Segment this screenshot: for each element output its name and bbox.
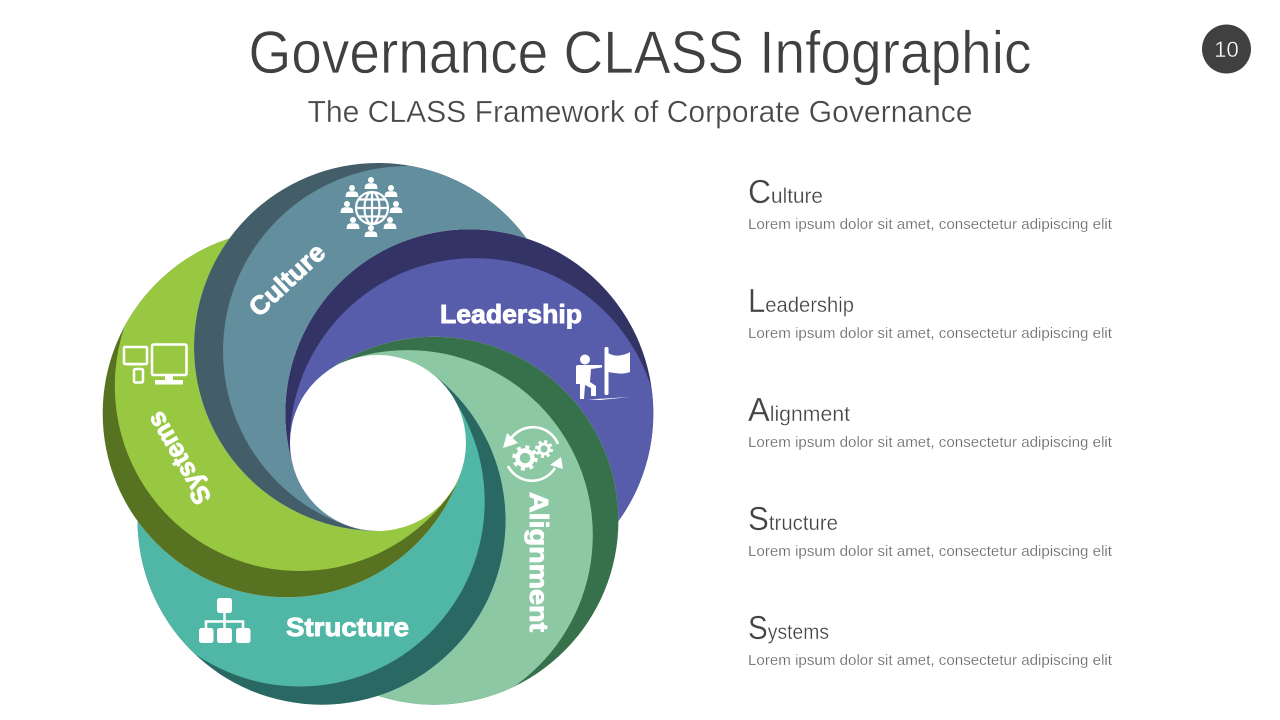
text block: Leadership (748, 282, 1112, 342)
label: Alignment: Alignment (524, 492, 554, 632)
page number badge (1202, 24, 1251, 74)
text block: Alignment: Lorem ipsum dolor sit amet, consectetur adipiscing elit (748, 435, 1112, 451)
subtitle: The CLASS Framework of Corporate Governance (308, 94, 972, 129)
title: Governance CLASS Infographic (248, 19, 1032, 86)
centre hole (290, 355, 466, 531)
text block: Leadership: Leadership (748, 282, 854, 319)
text block: Systems: Systems (748, 609, 829, 646)
icon: organisation chart (199, 598, 250, 643)
text block: Alignment (748, 391, 1112, 451)
text block: Structure: Lorem ipsum dolor sit amet, consectetur adipiscing elit (748, 544, 1112, 560)
icon: monitors and phone (124, 344, 186, 384)
label: Leadership: Leadership (440, 299, 582, 329)
text block: Structure (748, 500, 1112, 560)
text block: Structure: Structure (748, 500, 838, 537)
label: Culture: Culture (243, 237, 331, 322)
text block: Culture: Lorem ipsum dolor sit amet, consectetur adipiscing elit (748, 217, 1112, 233)
text block: Culture (748, 173, 1112, 233)
label: Structure: Structure (286, 612, 409, 642)
petal: Leadership (285, 229, 654, 521)
text block: Systems (748, 609, 1112, 669)
petal: Culture (194, 163, 527, 531)
petal: Systems (102, 238, 462, 598)
text block: Systems: Lorem ipsum dolor sit amet, consectetur adipiscing elit (748, 653, 1112, 669)
icon: globe and people (340, 177, 402, 237)
icon: person with flag (576, 347, 630, 400)
petal: Structure (138, 372, 506, 705)
label: Systems: Systems (140, 407, 217, 510)
text block: Leadership: Lorem ipsum dolor sit amet, consectetur adipiscing elit (748, 326, 1112, 342)
page number badge: 10 (1214, 37, 1239, 62)
text block: Alignment: Alignment (748, 391, 850, 428)
petal: Alignment (326, 336, 618, 705)
icon: gears with cycle arrows (503, 427, 563, 481)
text block: Culture: Culture (748, 173, 823, 210)
